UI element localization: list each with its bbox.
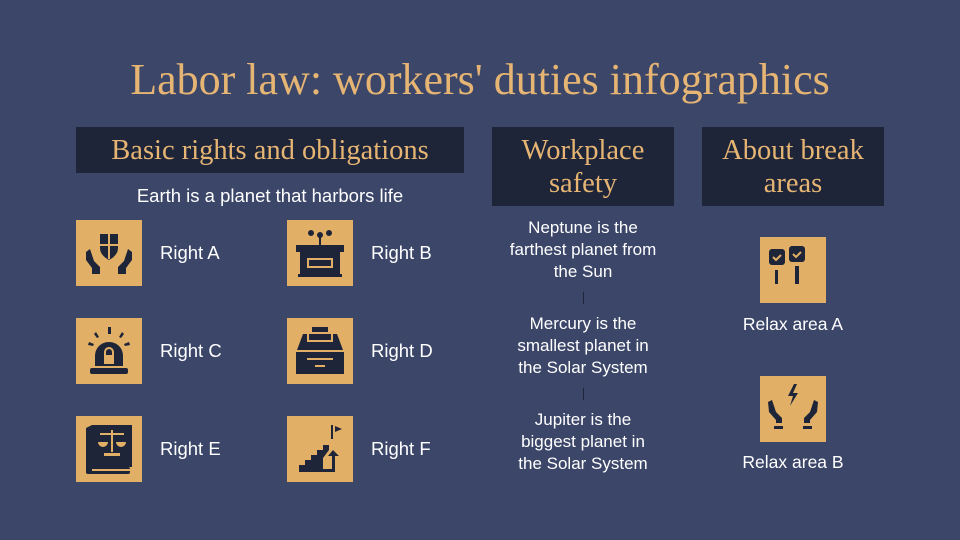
- label: right D: Right D: [371, 340, 433, 361]
- heading: workplace safety: Workplace: [522, 134, 644, 166]
- text: neptune: farthest planet from: [510, 240, 656, 259]
- icon: right F: [287, 416, 353, 482]
- subtitle: Earth is a planet that harbors life: [137, 185, 403, 206]
- heading: basic rights: [76, 127, 464, 173]
- heading: break areas: [702, 127, 884, 206]
- label: right B: Right B: [371, 242, 432, 263]
- heading: break areas: areas: [764, 168, 822, 198]
- label: right A: Right A: [160, 242, 220, 263]
- label: relax area B: Relax area B: [742, 452, 844, 472]
- icon: right B: [287, 220, 353, 286]
- icon: right A: [76, 220, 142, 286]
- text: jupiter: the Solar System: [518, 454, 648, 473]
- text: neptune: the Sun: [554, 262, 612, 281]
- icon: right D: [287, 318, 353, 384]
- text: jupiter: Jupiter is the: [535, 410, 631, 429]
- icon: relax area A: [760, 237, 826, 303]
- heading: workplace safety: [492, 127, 674, 206]
- text: mercury: the Solar System: [518, 358, 648, 377]
- text: mercury: Mercury is the: [530, 314, 636, 333]
- text: neptune: [510, 218, 656, 281]
- text: neptune: Neptune is the: [528, 218, 638, 237]
- text: mercury: [517, 314, 649, 377]
- divider line 2: [583, 388, 584, 400]
- heading: basic rights: Basic rights and obligations: [111, 134, 429, 166]
- label: right C: Right C: [160, 340, 222, 361]
- label: right E: Right E: [160, 438, 221, 459]
- divider line 1: [583, 292, 584, 304]
- text: jupiter: biggest planet in: [521, 432, 645, 451]
- title: Labor law: workers' duties infographics: [130, 55, 830, 104]
- icon: right C: [76, 318, 142, 384]
- icon: relax area B: [760, 376, 826, 442]
- heading: break areas: About break: [722, 134, 864, 166]
- text: mercury: smallest planet in: [517, 336, 649, 355]
- label: relax area A: Relax area A: [743, 314, 843, 334]
- heading: workplace safety: safety: [549, 168, 617, 198]
- label: right F: Right F: [371, 438, 431, 459]
- icon: right E: [76, 416, 142, 482]
- text: jupiter: [518, 410, 648, 473]
